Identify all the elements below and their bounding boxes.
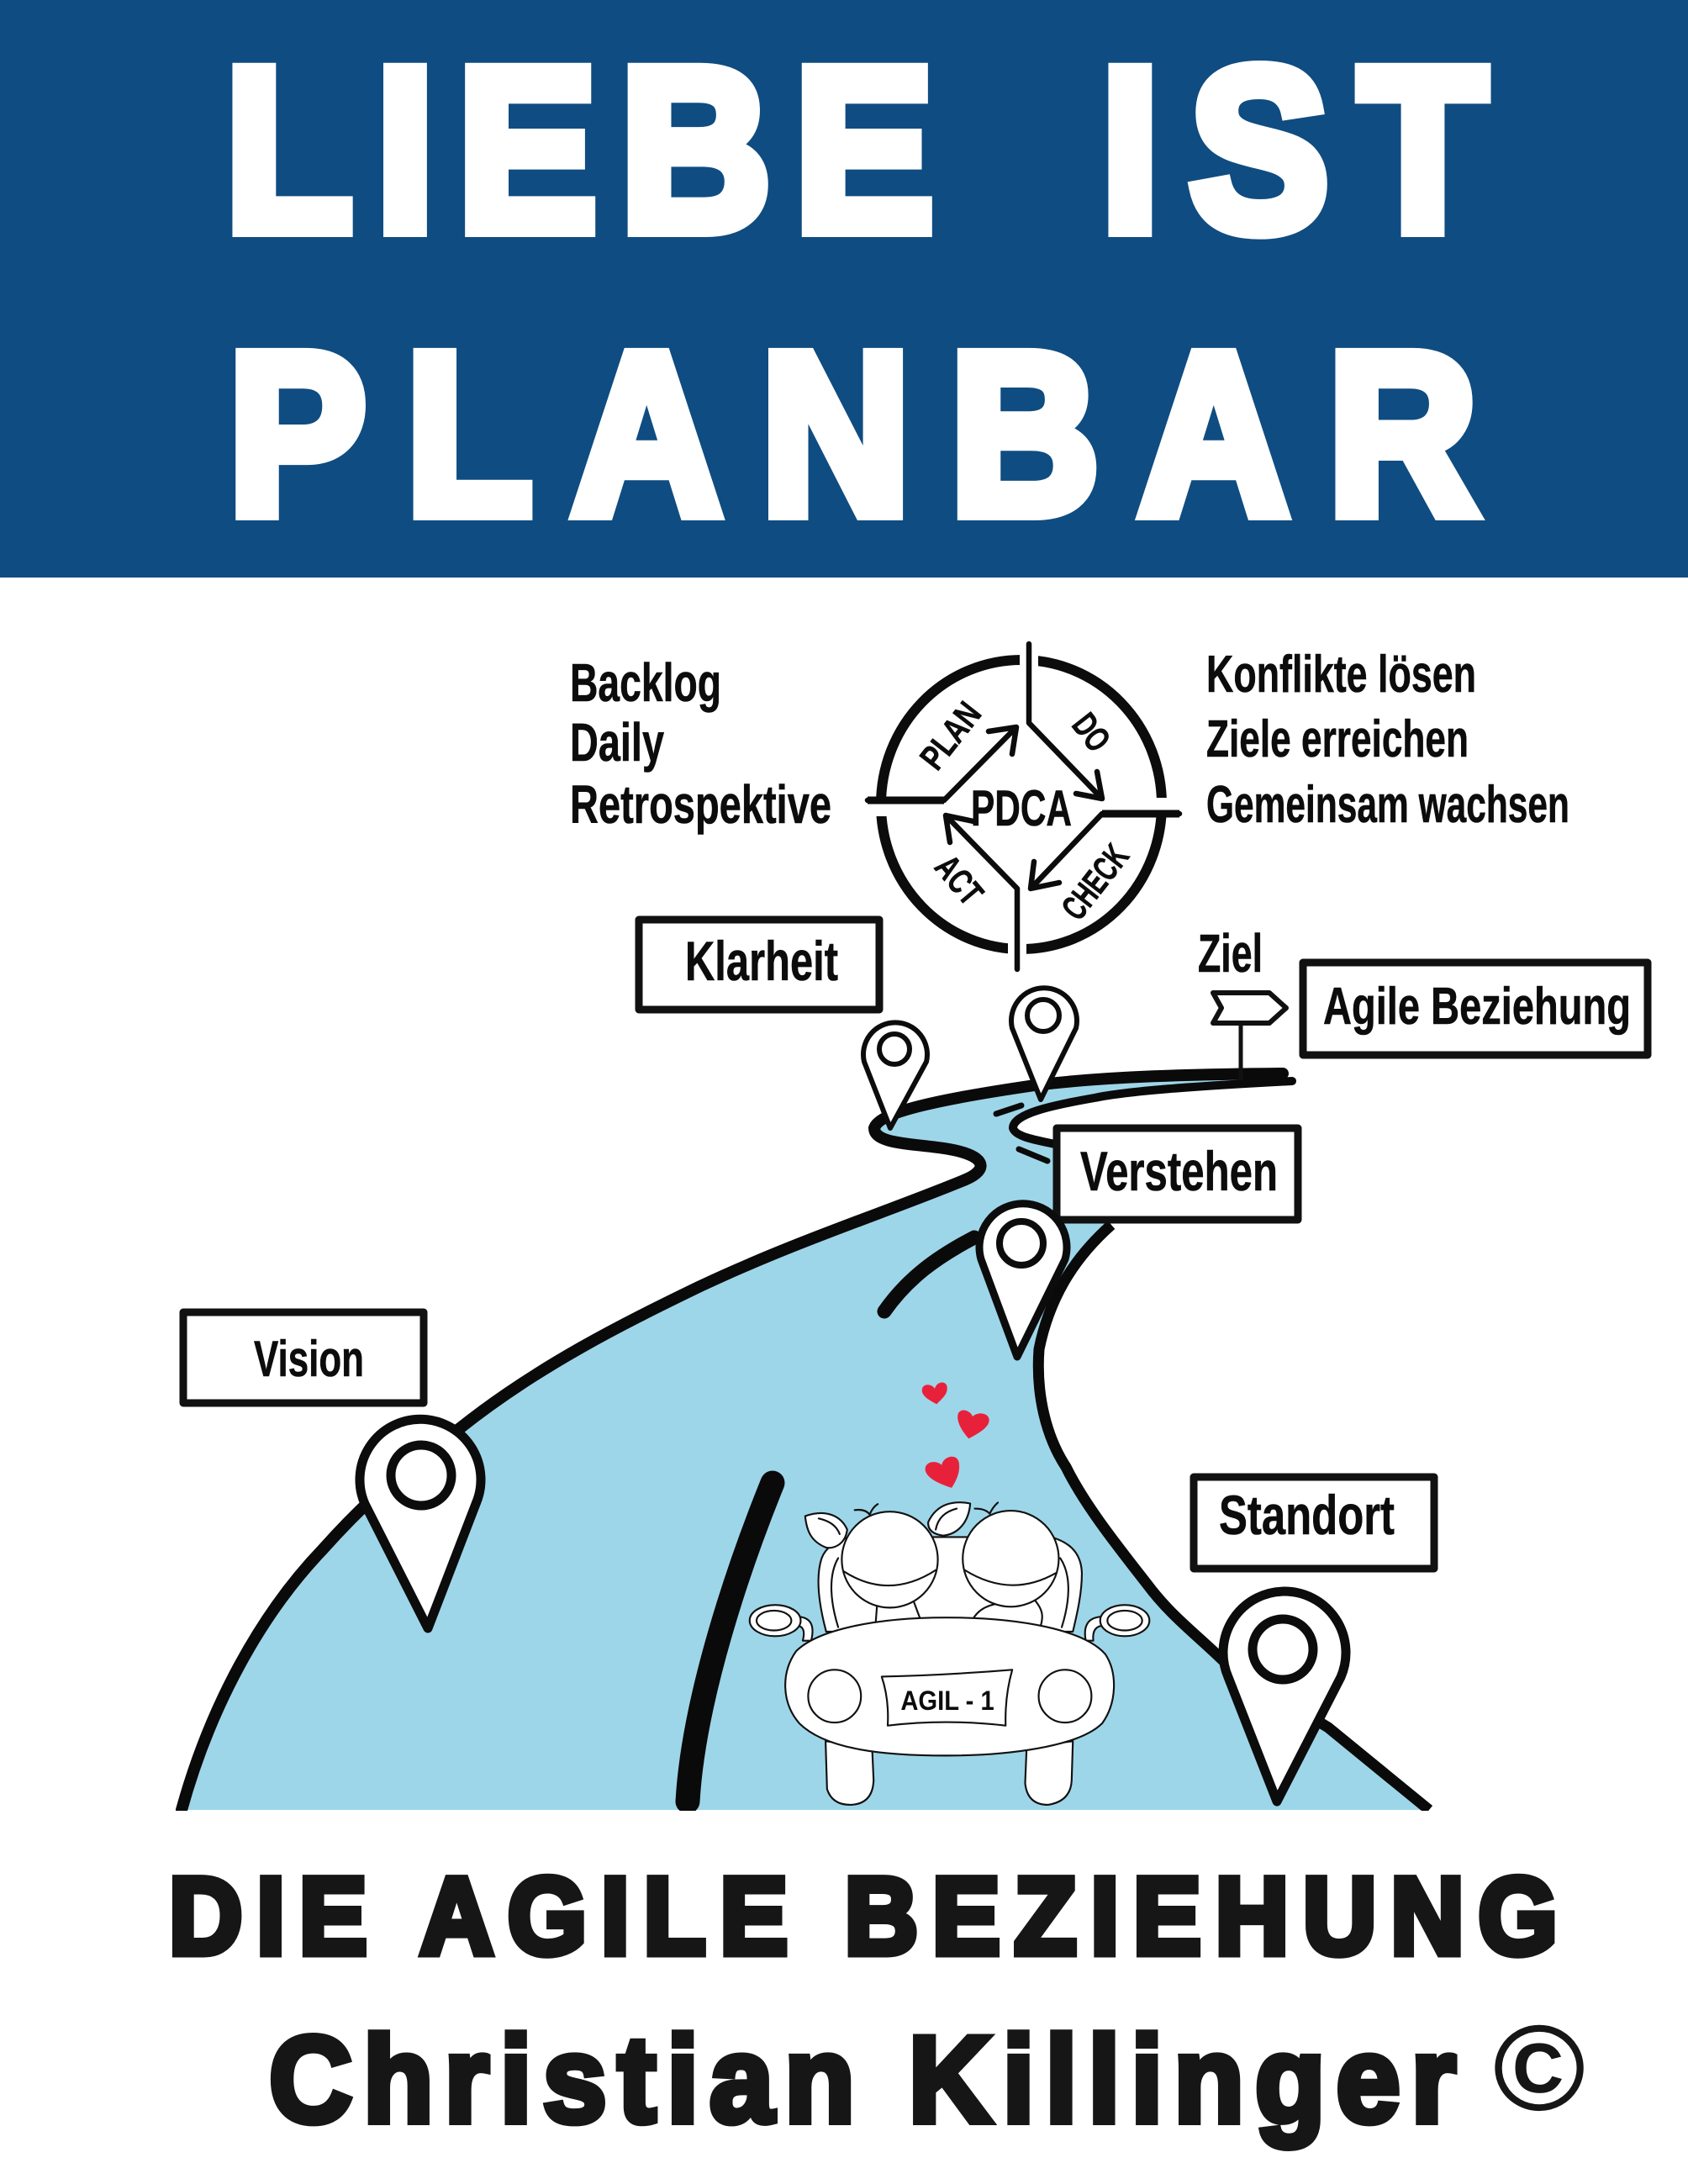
title line 1 bbox=[225, 21, 1486, 279]
left head bbox=[841, 1511, 938, 1607]
mirror arms bbox=[796, 1617, 813, 1641]
bodies bbox=[876, 1600, 921, 1622]
header banner bbox=[0, 0, 1688, 578]
hair bbox=[855, 1502, 998, 1515]
left mirror bbox=[750, 1605, 800, 1636]
list right: Konflikte lösen bbox=[1206, 646, 1476, 704]
box: Vision bbox=[183, 1312, 424, 1403]
road base mask bbox=[126, 1811, 1513, 1836]
label: CHECK: CHECK bbox=[1053, 836, 1137, 927]
title line 1: LIEBE bbox=[225, 21, 933, 279]
copyright symbol: © bbox=[1493, 2000, 1585, 2136]
right mirror glass bbox=[1107, 1611, 1142, 1631]
list left: Backlog bbox=[570, 652, 721, 713]
cycle arrows bbox=[868, 644, 1179, 969]
cycle ring bbox=[881, 660, 1162, 949]
centre line long dash bbox=[688, 1483, 773, 1802]
pin: PDCA bbox=[1011, 988, 1077, 1100]
destination sign bbox=[1213, 993, 1286, 1080]
box: Standort: Standort bbox=[1219, 1484, 1395, 1546]
box: Klarheit bbox=[639, 920, 879, 1010]
box: Verstehen: Verstehen bbox=[1080, 1140, 1278, 1202]
list right bbox=[1206, 646, 1569, 834]
title line 1: IST bbox=[1101, 21, 1486, 279]
right headlight bbox=[1039, 1670, 1091, 1722]
box: Klarheit: Klarheit bbox=[685, 930, 838, 992]
right head line bbox=[965, 1570, 1056, 1585]
list right: Ziele erreichen bbox=[1206, 710, 1469, 768]
list left bbox=[570, 652, 831, 835]
thick spokes bbox=[868, 800, 1179, 814]
title line 2: PLANBAR bbox=[229, 306, 1477, 562]
road left edge bbox=[182, 1074, 1283, 1810]
label: DO: DO bbox=[1064, 705, 1118, 759]
subtitle: DIE AGILE BEZIEHUNG bbox=[169, 1854, 1558, 1977]
box: Agile Beziehung bbox=[1303, 963, 1648, 1055]
pin: Klarheit bbox=[863, 1022, 927, 1128]
pin: Verstehen bbox=[979, 1204, 1067, 1357]
list left: Daily bbox=[570, 712, 664, 773]
left head line bbox=[844, 1570, 936, 1585]
road illustration bbox=[126, 1074, 1513, 1836]
road right edge upper bbox=[1013, 1081, 1292, 1145]
PDCA cycle diagram bbox=[868, 639, 1179, 971]
right mirror bbox=[1100, 1605, 1149, 1636]
seat back bbox=[819, 1537, 1082, 1632]
right head bbox=[963, 1511, 1058, 1606]
plate text: AGIL - 1 bbox=[900, 1685, 994, 1716]
car with couple bbox=[750, 1382, 1149, 1805]
small road dashes bbox=[996, 1105, 1047, 1161]
centre leaf bbox=[928, 1502, 970, 1536]
ring gaps bbox=[868, 639, 1179, 971]
pin: Standort bbox=[1223, 1591, 1346, 1802]
left leaf bbox=[805, 1513, 847, 1548]
author: Christian Killinger bbox=[269, 2012, 1456, 2149]
label: PLAN: PLAN bbox=[912, 694, 989, 777]
box: Vision: Vision bbox=[254, 1331, 364, 1387]
left leaf vein bbox=[819, 1518, 840, 1534]
licence plate bbox=[882, 1670, 1012, 1726]
wheels bbox=[826, 1741, 873, 1805]
label: ACT: ACT bbox=[927, 847, 991, 913]
label: PDCA: PDCA bbox=[971, 780, 1072, 836]
car body bbox=[785, 1617, 1114, 1755]
inner seat lines bbox=[831, 1558, 1068, 1627]
road surface bbox=[182, 1074, 1429, 1810]
road right edge lower bbox=[1038, 1225, 1429, 1810]
left headlight bbox=[808, 1670, 861, 1722]
box: Verstehen bbox=[1057, 1128, 1298, 1220]
centre line short dash bbox=[884, 1237, 974, 1311]
list left: Retrospektive bbox=[570, 774, 831, 835]
left mirror glass bbox=[757, 1611, 791, 1631]
pin: Vision bbox=[360, 1419, 481, 1628]
box: Standort bbox=[1194, 1477, 1434, 1569]
centre leaf vein bbox=[936, 1509, 957, 1530]
hearts bbox=[922, 1382, 989, 1488]
label: Ziel: Ziel bbox=[1198, 923, 1263, 984]
